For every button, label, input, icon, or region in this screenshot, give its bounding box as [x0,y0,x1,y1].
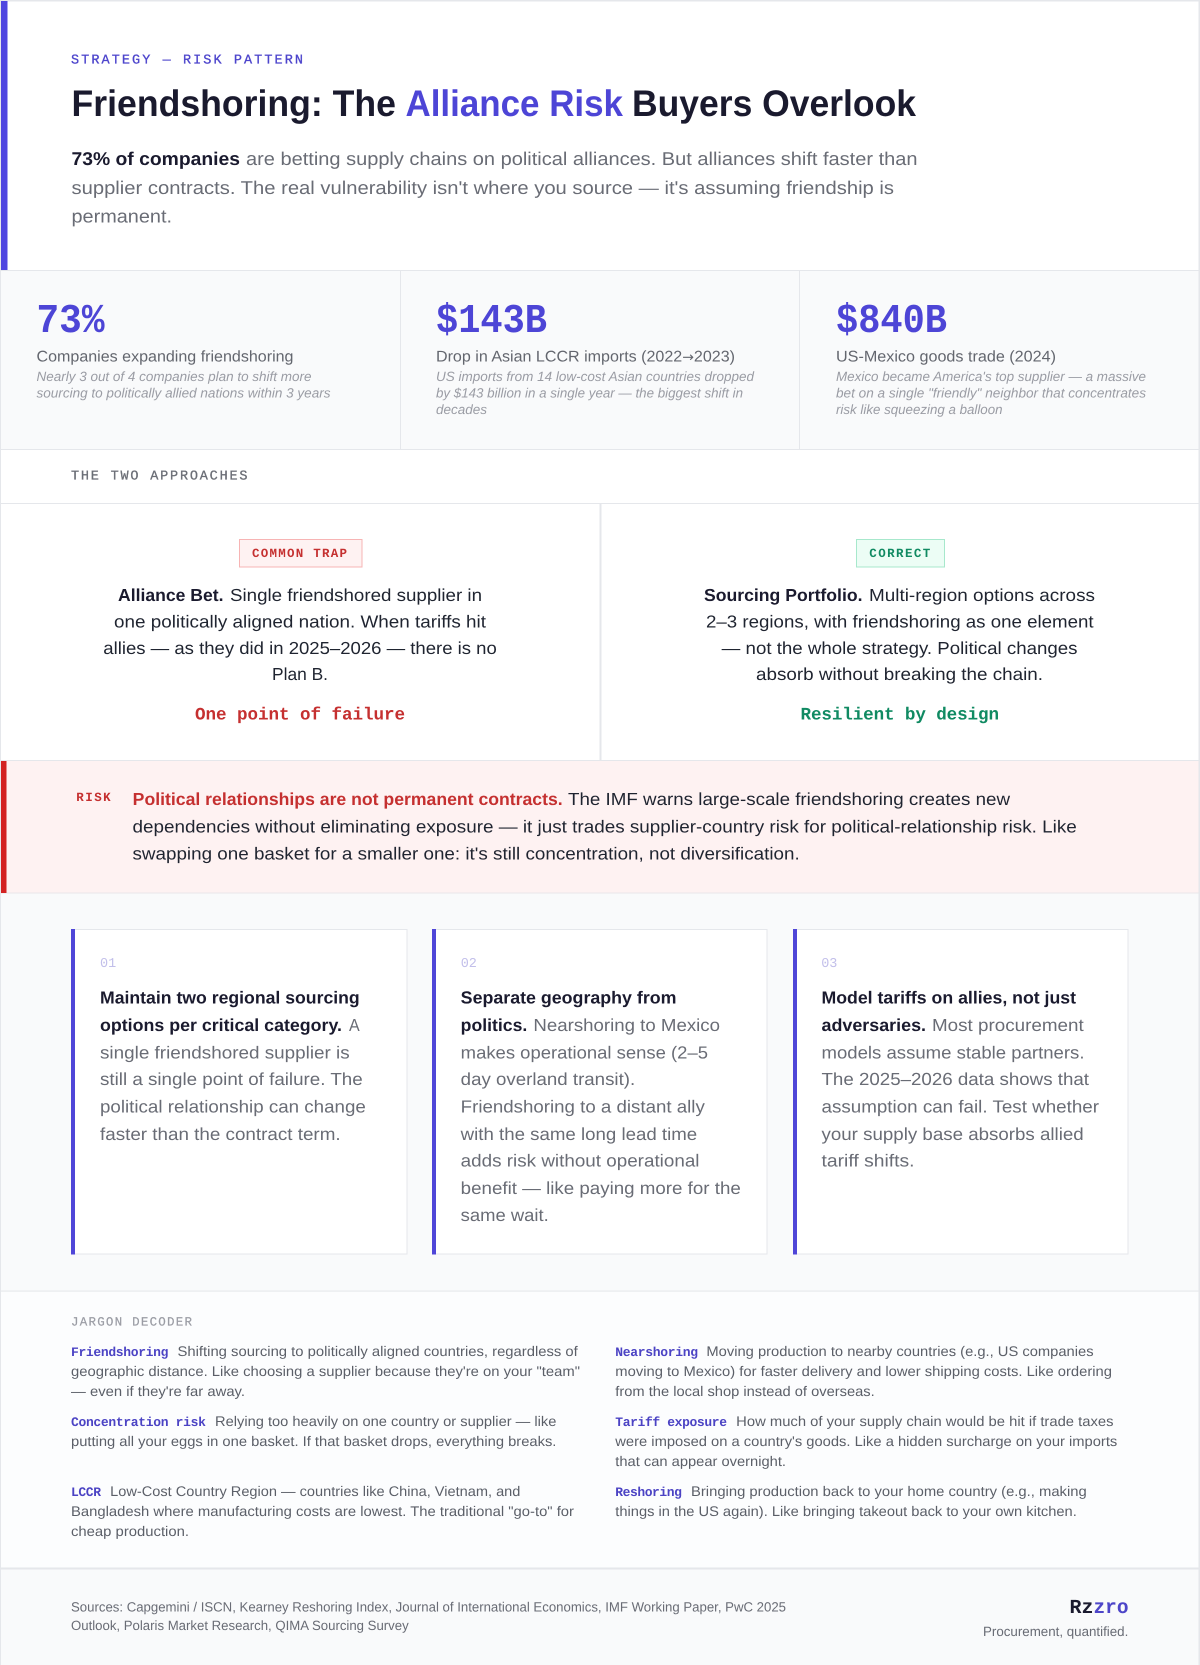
lede paragraph [72,148,918,226]
stat: 73%: Companies expanding friendshoring [36,348,294,365]
card 03: Model tariffs on allies, not just [822,988,1076,1008]
card 02: adds risk without operational [461,1150,700,1170]
term: friendshoring: Shifting sourcing to politically aligned countries, regardless of [178,1343,578,1359]
card 03: assumption can fail. Test whether [822,1097,1099,1117]
term: lccr [71,1483,574,1539]
stat: $840B: risk like squeezing a balloon [836,402,1002,417]
panel: header [0,0,1200,270]
risk text: The IMF warns large-scale friendshoring creates new [568,789,1010,809]
sources [71,1600,786,1633]
card 01: A [349,1015,360,1035]
stat: $840B [836,299,1146,417]
card 02: politics. [461,1015,527,1035]
stat: $143B: US imports from 14 low-cost Asian countries dropped [436,369,755,384]
term: tariff exposure: were imposed on a country's goods. Like a hidden surcharge on your imports [614,1433,1117,1449]
card 03: adversaries. [822,1015,926,1035]
term: nearshoring: Moving production to nearby countries (e.g., US companies [706,1343,1094,1359]
title: Buyers Overlook [632,83,916,124]
sources: Sources: Capgemini / ISCN, Kearney Reshoring Index, Journal of International Economics, IMF Working Paper, PwC 2025 [71,1600,786,1614]
card 01: political relationship can change [100,1097,366,1117]
text: sourcing portfolio: — not the whole strategy. Political changes [722,638,1078,658]
stat: $143B: $143B [436,299,547,345]
term: friendshoring: — even if they're far away. [71,1383,245,1399]
risk label: RISK [76,791,111,805]
lede paragraph: are betting supply chains on political alliances. But alliances shift faster than [246,148,918,169]
stat: $840B: US-Mexico goods trade (2024) [836,348,1056,365]
term: nearshoring: from the local shop instead of overseas. [615,1383,875,1399]
card 03: your supply base absorbs allied [822,1124,1084,1144]
tag: common trap [240,540,362,567]
term: lccr: Low-Cost Country Region — countries like China, Vietnam, and [110,1483,520,1499]
term: lccr: LCCR [71,1485,101,1500]
panel: action cards [0,894,1200,1291]
text: alliance bet: Single friendshored supplier in [230,585,482,605]
term: tariff exposure [614,1413,1117,1469]
term: concentration risk: Concentration risk [71,1415,206,1430]
term: concentration risk: Relying too heavily on one country or supplier — like [215,1413,557,1429]
logo: Rz [1070,1597,1094,1620]
sources: Outlook, Polaris Market Research, QIMA Sourcing Survey [71,1618,409,1633]
accent bar [1,1,8,270]
tag: correct: CORRECT [869,547,931,561]
term: reshoring: things in the US again). Like bringing takeout back to your own kitchen. [615,1503,1077,1519]
outcome: resilient by design: Resilient by design [800,706,999,726]
jargon heading: JARGON DECODER [71,1316,192,1330]
term: lccr: Bangladesh where manufacturing costs are lowest. The traditional "go-to" for [71,1503,574,1519]
text: alliance bet: one politically aligned nation. When tariffs hit [114,611,486,631]
term: friendshoring: geographic distance. Like choosing a supplier because they're on your "team" [71,1363,580,1379]
stat: $143B: by $143 billion in a single year — the biggest shift in [436,386,743,401]
text: alliance bet: allies — as they did in 2025–2026 — there is no [103,638,497,658]
term: concentration risk: putting all your eggs in one basket. If that basket drops, everything breaks. [71,1433,556,1449]
card 01: single friendshored supplier is [100,1042,350,1062]
card 03: models assume stable partners. [822,1042,1084,1062]
term: nearshoring: moving to Mexico) for faster delivery and lower shipping costs. Like ordering [615,1363,1112,1379]
risk text: dependencies without eliminating exposure — it just trades supplier-country risk for political-relationship risk. Like [132,816,1077,836]
text: sourcing portfolio: absorb without breaking the chain. [756,664,1043,684]
stat: $840B: Mexico became America's top supplier — a massive [836,369,1146,384]
panel: correct approach [602,504,1200,760]
lede paragraph: supplier contracts. The real vulnerability isn't where you source — it's assuming friendship is [72,177,894,198]
tag: correct [856,540,944,567]
eyebrow: STRATEGY — RISK PATTERN [71,54,303,69]
term: reshoring [615,1483,1087,1519]
stat: $143B: decades [436,402,487,417]
stat: $840B: $840B [836,299,947,345]
term: tariff exposure: that can appear overnight. [615,1453,786,1469]
text: sourcing portfolio: 2–3 regions, with friendshoring as one element [706,611,1094,631]
term: friendshoring [71,1343,580,1399]
text: sourcing portfolio: Multi-region options across [869,585,1095,605]
lede paragraph: permanent. [72,206,172,226]
stat: $143B [436,299,755,417]
term: nearshoring [615,1343,1112,1399]
card 02: with the same long lead time [460,1124,697,1144]
card 01: faster than the contract term. [100,1124,341,1144]
section heading: the two approaches [0,450,1200,504]
risk text: swapping one basket for a smaller one: it's still concentration, not diversification. [132,844,800,864]
card 02 [432,929,767,1254]
card 02: benefit — like paying more for the [461,1178,741,1198]
panel: jargon decoder [0,1290,1200,1568]
title: Friendshoring: The [72,83,396,124]
panel: footer [0,1568,1200,1665]
title: Alliance Risk [406,83,623,124]
logo: zro [1094,1597,1128,1620]
tagline: Procurement, quantified. [983,1624,1128,1639]
card 02: Nearshoring to Mexico [533,1015,720,1035]
term: reshoring: Reshoring [615,1485,682,1500]
card 03: tariff shifts. [822,1150,914,1170]
card 02: same wait. [461,1205,549,1225]
term: concentration risk [71,1413,557,1449]
tag: common trap: COMMON TRAP [252,547,347,561]
term: tariff exposure: How much of your supply chain would be hit if trade taxes [736,1413,1114,1429]
text: sourcing portfolio [704,585,1095,684]
term: reshoring: Bringing production back to your home country (e.g., making [691,1483,1087,1499]
outcome: one point of failure: One point of failure [195,706,405,726]
risk text [132,789,1077,864]
stat: 73%: sourcing to politically allied nations within 3 years [36,386,331,401]
stat: $840B: bet on a single "friendly" neighbor that concentrates [836,386,1146,401]
term: friendshoring: Friendshoring [71,1345,169,1360]
text: alliance bet [103,585,497,684]
section heading: the two approaches: THE TWO APPROACHES [71,470,248,484]
card 03: The 2025–2026 data shows that [822,1069,1089,1089]
card 02: day overland transit). [461,1069,635,1089]
card 01: options per critical category. [100,1015,342,1035]
text: alliance bet: Plan B. [272,664,328,684]
title [72,83,916,124]
lede paragraph: 73% of companies [72,148,240,169]
card 01: still a single point of failure. The [100,1069,363,1089]
term: tariff exposure: Tariff exposure [615,1415,727,1430]
card 03: Most procurement [932,1015,1084,1035]
card 03: 03 [821,957,837,972]
stat: 73%: 73% [36,299,105,345]
card 01: 01 [100,957,116,972]
stat: 73% [36,299,331,401]
text: alliance bet: Alliance Bet. [118,585,224,605]
risk text: Political relationships are not permanent contracts. [133,789,563,809]
card 03 [793,929,1128,1254]
stat: $143B: Drop in Asian LCCR imports (2022 →2023) [436,348,735,365]
card 02: Separate geography from [461,988,676,1008]
callout: risk [0,760,1200,894]
card 01 [71,929,407,1254]
term: nearshoring: Nearshoring [615,1345,698,1360]
panel: common trap [0,504,600,760]
card 02: makes operational sense (2–5 [461,1042,708,1062]
card 02: Friendshoring to a distant ally [461,1097,705,1117]
panel: stats row [0,270,1200,450]
stat: 73%: Nearly 3 out of 4 companies plan to shift more [36,369,312,384]
term: lccr: cheap production. [71,1523,189,1539]
card 01: Maintain two regional sourcing [100,988,360,1008]
card 02: 02 [461,957,477,972]
logo [1070,1597,1128,1620]
text: sourcing portfolio: Sourcing Portfolio. [704,585,862,605]
